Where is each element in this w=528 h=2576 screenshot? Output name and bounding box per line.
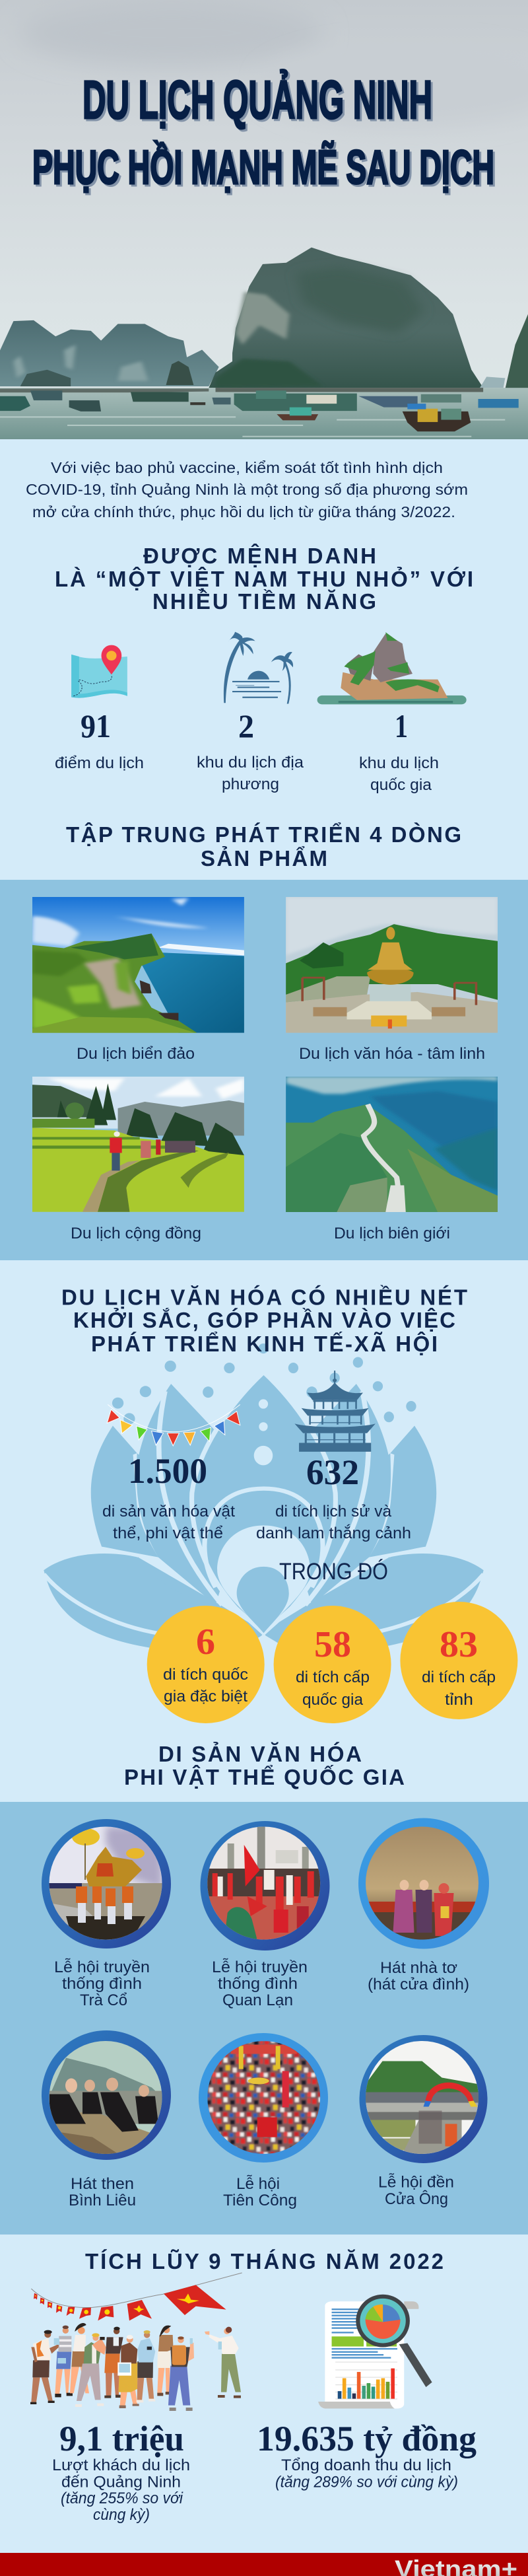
- caption: Hát nhà tơ: [380, 1959, 457, 1977]
- icon: pagoda: [294, 1371, 376, 1452]
- caption: Bình Liêu: [69, 2192, 136, 2209]
- panel: introduction and potential: [0, 439, 528, 880]
- heading: cultural tourism: KHỞI SẮC, GÓP PHẦN VÀO VIỆC: [73, 1308, 455, 1332]
- stat: 19,635 billion dong revenue: [257, 2419, 477, 2491]
- panel: intangible heritage gallery: [0, 1802, 528, 2235]
- stat: 9.1 million visitors: cùng kỳ): [93, 2506, 150, 2524]
- stat: 2 local tourist areas: [197, 707, 304, 793]
- stat: 91 tourist sites: 91: [81, 707, 111, 744]
- stat: 1.500 heritage items: thể, phi vật thể: [113, 1524, 223, 1542]
- caption: [212, 1958, 308, 2009]
- stat: 1.500 heritage items: di sản văn hóa vật: [102, 1503, 235, 1521]
- stat: 1 national tourist area: quốc gia: [370, 776, 432, 794]
- photo circle: Cửa Ông festival: [359, 2035, 487, 2163]
- photo circle: Trà Cổ festival: [42, 1819, 171, 1949]
- caption: Du lịch biên giới: [334, 1225, 450, 1242]
- caption: Cửa Ông: [385, 2190, 448, 2208]
- stat: 9.1 million visitors: Lượt khách du lịch: [52, 2456, 190, 2474]
- callout: 83 provincial relics: [400, 1602, 517, 1719]
- stat: 632 relics: danh lam thắng cảnh: [256, 1524, 411, 1542]
- panel: four product photos: [0, 880, 528, 1260]
- caption: Du lịch văn hóa - tâm linh: [299, 1045, 485, 1063]
- callout: 6 special national relics: [147, 1606, 265, 1723]
- heading: national intangible heritage: [124, 1742, 405, 1789]
- caption: thống đình: [62, 1975, 142, 1993]
- stat: 632 relics: di tích lịch sử và: [275, 1503, 392, 1521]
- photo: sea and island tourism: [32, 897, 244, 1033]
- photo: community tourism: [32, 1077, 244, 1212]
- heading: four product lines: [66, 822, 461, 871]
- icon: map with pin: [71, 645, 127, 698]
- caption: thống đình: [218, 1975, 298, 1993]
- title: [32, 70, 496, 196]
- caption: (hát cửa đình): [368, 1976, 469, 1993]
- big island: [209, 248, 483, 388]
- heading: potential: LÀ “MỘT VIỆT NAM THU NHỎ” VỚI: [55, 566, 473, 591]
- caption: [69, 2175, 136, 2209]
- boats: [0, 388, 209, 392]
- heading: national intangible heritage: PHI VẬT THỂ QUỐC GIA: [124, 1764, 405, 1789]
- stat: 9.1 million visitors: [52, 2419, 190, 2524]
- photo circle: Quan Lạn festival: [201, 1821, 330, 1950]
- stat: 2 local tourist areas: 2: [238, 707, 254, 744]
- stat: 19,635 billion dong revenue: (tăng 289% so với cùng kỳ): [275, 2473, 458, 2491]
- icon: Vietnamese flag bunting: [31, 2273, 242, 2320]
- callout: 83 provincial relics: 83: [440, 1624, 478, 1665]
- intro text: [26, 459, 468, 520]
- illustration: group of tourists and guide: [30, 2323, 241, 2411]
- heading: cultural tourism: PHÁT TRIỂN KINH TẾ-XÃ HỘI: [91, 1331, 438, 1356]
- caption: Trà Cổ: [80, 1991, 127, 2009]
- icon: palm trees and sunset: [224, 632, 293, 704]
- heading: potential: [55, 544, 473, 614]
- caption: Tiên Công: [223, 2192, 297, 2209]
- icon: karst rock island: [317, 632, 467, 704]
- side and small islets: [505, 314, 528, 389]
- intro text: mở cửa chính thức, phục hồi du lịch từ giữa tháng 3/2022.: [32, 503, 455, 520]
- caption: Du lịch biển đảo: [77, 1045, 195, 1063]
- panel: nine month results: [0, 2235, 528, 2553]
- photo: border tourism: [286, 1077, 498, 1212]
- intro text: Với việc bao phủ vaccine, kiểm soát tốt tình hình dịch: [51, 459, 443, 476]
- caption: [378, 2173, 454, 2208]
- heading: four product lines: TẬP TRUNG PHÁT TRIỂN 4 DÒNG: [66, 822, 461, 847]
- stat: 9.1 million visitors: đến Quảng Ninh: [61, 2473, 181, 2491]
- stat: 91 tourist sites: điểm du lịch: [55, 754, 144, 772]
- callout: 6 special national relics: di tích quốc: [163, 1666, 248, 1684]
- caption: [223, 2175, 297, 2209]
- stat: 632 relics: [256, 1452, 411, 1542]
- stat: 19,635 billion dong revenue: Tổng doanh thu du lịch: [281, 2456, 451, 2474]
- intro text: COVID-19, tỉnh Quảng Ninh là một trong số địa phương sớm: [26, 481, 468, 498]
- stat: 9.1 million visitors: 9,1 triệu: [59, 2419, 184, 2458]
- heading: nine months of 2022: TÍCH LŨY 9 THÁNG NĂM 2022: [85, 2249, 444, 2273]
- panel: hero photo: [0, 0, 528, 443]
- caption: Quan Lạn: [222, 1991, 293, 2009]
- stat: 91 tourist sites: [55, 707, 144, 772]
- panel: cultural tourism: [0, 1260, 528, 1802]
- callout: 58 national relics: di tích cấp: [296, 1668, 370, 1686]
- caption: Hát then: [71, 2175, 134, 2193]
- stat: 1 national tourist area: 1: [395, 707, 408, 744]
- label: among which: TRONG ĐÓ: [279, 1559, 388, 1585]
- callout: 83 provincial relics: di tích cấp: [422, 1668, 496, 1686]
- stat: 2 local tourist areas: phương: [222, 775, 279, 793]
- stat: 19,635 billion dong revenue: 19.635 tỷ đồng: [257, 2419, 477, 2458]
- icon: festival bunting: [107, 1404, 240, 1446]
- photo circle: Tiên Công festival: [199, 2033, 328, 2163]
- callout: 6 special national relics: 6: [196, 1622, 215, 1663]
- callout: 58 national relics: 58: [314, 1624, 351, 1665]
- far mountains: [0, 320, 219, 386]
- stat: 1 national tourist area: [359, 707, 439, 794]
- caption: Lễ hội truyền: [212, 1958, 308, 1976]
- heading: cultural tourism: DU LỊCH VĂN HÓA CÓ NHIỀU NÉT: [61, 1285, 467, 1309]
- stat: 9.1 million visitors: (tăng 255% so với: [61, 2489, 183, 2507]
- heading: national intangible heritage: DI SẢN VĂN HÓA: [158, 1742, 362, 1766]
- callout: 6 special national relics: gia đặc biệt: [164, 1688, 248, 1705]
- heading: four product lines: SẢN PHẨM: [201, 846, 327, 871]
- icon: report with magnifier: [318, 2295, 432, 2408]
- callout: 58 national relics: quốc gia: [302, 1691, 364, 1709]
- heading: potential: NHIỀU TIỀM NĂNG: [152, 589, 376, 614]
- caption: Lễ hội truyền: [54, 1958, 150, 1976]
- photo: cultural and spiritual tourism: [286, 897, 498, 1033]
- stat: 1.500 heritage items: [102, 1451, 235, 1542]
- stat: 2 local tourist areas: khu du lịch địa: [197, 754, 304, 771]
- caption: [54, 1958, 150, 2009]
- callout: 83 provincial relics: tỉnh: [445, 1691, 473, 1709]
- stat: 632 relics: 632: [306, 1452, 359, 1492]
- heading: cultural tourism: [61, 1285, 467, 1356]
- footer: [0, 2553, 528, 2576]
- photo circle: Hát then Bình Liêu: [42, 2030, 171, 2160]
- caption: Du lịch cộng đồng: [71, 1225, 201, 1242]
- stat: 1 national tourist area: khu du lịch: [359, 754, 439, 772]
- caption: Lễ hội: [236, 2175, 280, 2193]
- caption: [368, 1959, 469, 1993]
- water: [0, 388, 528, 443]
- background lotus: [44, 1343, 484, 1655]
- stat: 1.500 heritage items: 1.500: [128, 1451, 207, 1491]
- caption: Lễ hội đền: [378, 2173, 454, 2192]
- photo circle: Hát nhà tơ singing: [358, 1818, 489, 1949]
- callout: 58 national relics: [274, 1606, 391, 1723]
- heading: potential: ĐƯỢC MỆNH DANH: [143, 544, 376, 568]
